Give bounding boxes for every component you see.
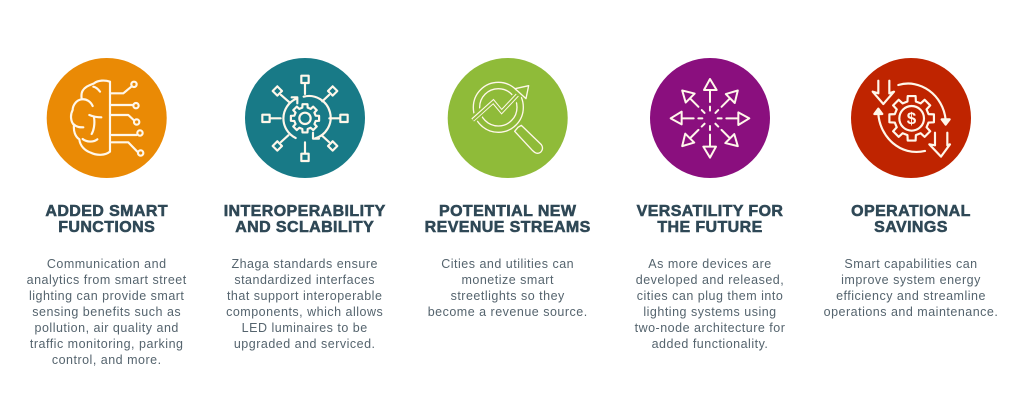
text: interoperability description: upgraded and serviced. — [234, 337, 376, 351]
heading: added smart functions: ADDED SMART — [45, 203, 168, 220]
panel: operational savings — [824, 58, 998, 319]
text: added smart functions description: analytics from smart street — [27, 273, 187, 287]
heading: interoperability and sclability: AND SCLABILITY — [235, 219, 374, 236]
text: operational savings description: Smart capabilities can — [844, 257, 978, 271]
text: added smart functions description: control, and more. — [52, 353, 162, 367]
panel: potential new revenue streams — [425, 58, 591, 319]
text: versatility description: lighting systems using — [643, 305, 777, 319]
text: operational savings description: improve system energy — [841, 273, 981, 287]
heading: operational savings: OPERATIONAL — [851, 203, 971, 220]
text: revenue streams description: monetize smart — [461, 273, 554, 287]
icon: purple circle with radiating arrows — [650, 58, 770, 178]
text: interoperability description: standardized interfaces — [234, 273, 375, 287]
text: operational savings description: efficiency and streamline — [836, 289, 986, 303]
heading: operational savings: SAVINGS — [874, 219, 948, 236]
panel: versatility for the future — [635, 58, 785, 351]
heading: potential new revenue streams: POTENTIAL NEW — [439, 203, 577, 220]
icon: red circle with dollar gear — [851, 58, 971, 178]
text: operational savings description: operations and maintenance. — [824, 305, 998, 319]
icon: green circle with magnifier and rising arrow — [448, 58, 568, 178]
heading: interoperability and sclability: INTEROPERABILITY — [224, 203, 386, 220]
text: added smart functions description: lighting can provide smart — [29, 289, 184, 303]
heading: potential new revenue streams: REVENUE STREAMS — [425, 219, 591, 236]
text: interoperability description: LED luminaires to be — [242, 321, 368, 335]
icon: teal circle with gear network — [245, 58, 365, 178]
text: interoperability description: Zhaga standards ensure — [231, 257, 378, 271]
text: interoperability description: components, which allows — [226, 305, 383, 319]
text: versatility description: two-node architecture for — [635, 321, 785, 335]
text: revenue streams description: become a revenue source. — [428, 305, 588, 319]
text: versatility description: As more devices are — [648, 257, 772, 271]
icon: orange circle with brain — [47, 58, 167, 178]
icon: dollar sign: $ — [907, 109, 917, 128]
text: revenue streams description: Cities and utilities can — [441, 257, 574, 271]
heading: versatility for the future: VERSATILITY FOR — [637, 203, 783, 220]
text: added smart functions description: Communication and — [47, 257, 167, 271]
text: versatility description: added functionality. — [652, 337, 768, 351]
heading: versatility for the future: THE FUTURE — [657, 219, 763, 236]
text: added smart functions description: pollution, air quality and — [35, 321, 179, 335]
text: added smart functions description: sensing benefits such as — [32, 305, 181, 319]
heading: added smart functions: FUNCTIONS — [58, 219, 155, 236]
text: added smart functions description: traffic monitoring, parking — [30, 337, 184, 351]
text: revenue streams description: streetlights so they — [451, 289, 565, 303]
panel: interoperability and scalability — [224, 58, 386, 351]
text: interoperability description: that support interoperable — [227, 289, 382, 303]
panel: added smart functions — [27, 58, 187, 367]
text: versatility description: cities can plug them into — [637, 289, 783, 303]
text: versatility description: developed and released, — [636, 273, 784, 287]
